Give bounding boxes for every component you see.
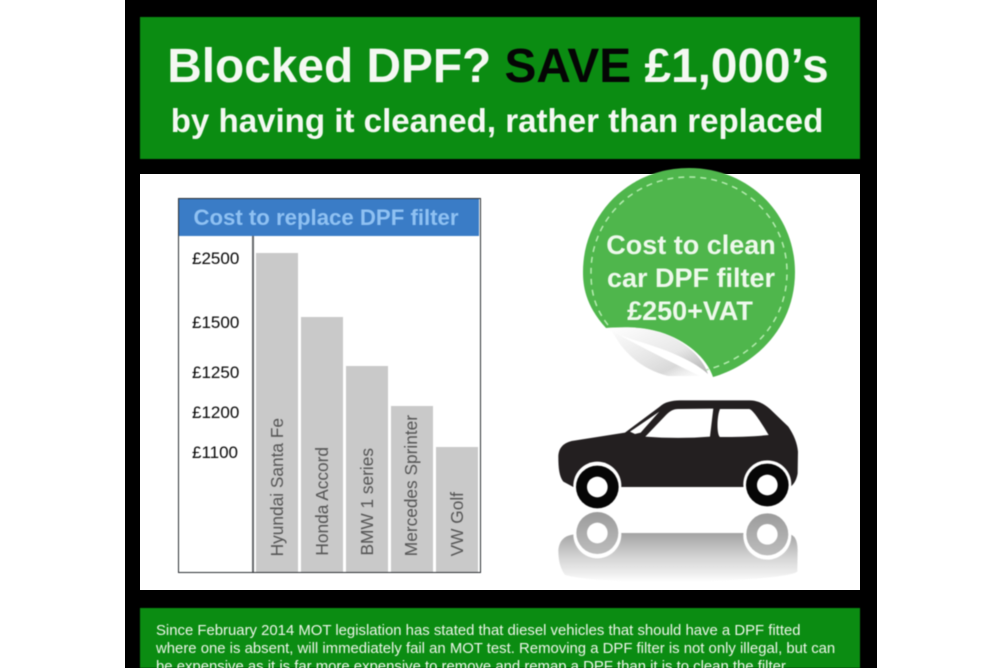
rear side window [717, 409, 769, 437]
value label: 1200: £1200 [192, 403, 239, 422]
stitched dashed ring [591, 177, 787, 370]
value label: 1250: £1250 [192, 363, 239, 382]
bottom information panel [140, 608, 860, 668]
bar: BMW 1 series [346, 366, 388, 572]
body text: where one is absent, will immediately fail an MOT test. Removing a DPF filter is not only illegal, but can [156, 641, 835, 657]
rear wheel arch [743, 460, 791, 508]
sticker page curl [606, 328, 708, 374]
chart heading: Cost to replace DPF filter [193, 205, 459, 230]
bar label: Hyundai Santa Fe [266, 418, 286, 556]
rear wheel [746, 464, 789, 506]
car reflection [558, 510, 798, 582]
header banner [140, 17, 860, 159]
quarter light [630, 412, 659, 434]
sticker: cost to clean [583, 168, 795, 377]
bar: VW Golf [436, 447, 478, 572]
subtitle: by having it cleaned, rather than replaced [171, 103, 823, 140]
value axis line [252, 236, 254, 572]
bar: Hyundai Santa Fe [256, 253, 298, 572]
bar chart panel [178, 198, 481, 573]
front wheel [576, 466, 619, 508]
sticker: cost to clean: car DPF filter [607, 263, 776, 293]
sticker: cost to clean: £250+VAT [627, 296, 753, 326]
car body [558, 400, 798, 487]
windscreen [645, 409, 713, 438]
chart heading [179, 199, 479, 236]
value label: 1100: £1100 [192, 443, 238, 462]
value label: 2500: £2500 [192, 249, 239, 268]
bar: Honda Accord [300, 317, 343, 572]
body text [155, 623, 836, 668]
sticker text: Cost to clean [606, 230, 776, 260]
car illustration [558, 400, 798, 582]
black backing column [125, 0, 877, 668]
bar: Mercedes Sprinter [390, 406, 433, 572]
bar label: Honda Accord [312, 447, 332, 556]
value label: 1500: £1500 [192, 313, 239, 332]
sticker peel shadow [612, 331, 700, 376]
body text: Since February 2014 MOT legislation has stated that diesel vehicles that should have a DPF fitted [156, 623, 801, 639]
front wheel arch [573, 462, 621, 510]
bar label: Mercedes Sprinter [400, 415, 420, 556]
sticker disc [583, 168, 795, 377]
white content panel [140, 174, 860, 590]
title: Blocked DPF? SAVE £1,000’s [167, 40, 829, 93]
bar label: BMW 1 series [356, 448, 376, 556]
bar label: VW Golf [446, 492, 466, 556]
